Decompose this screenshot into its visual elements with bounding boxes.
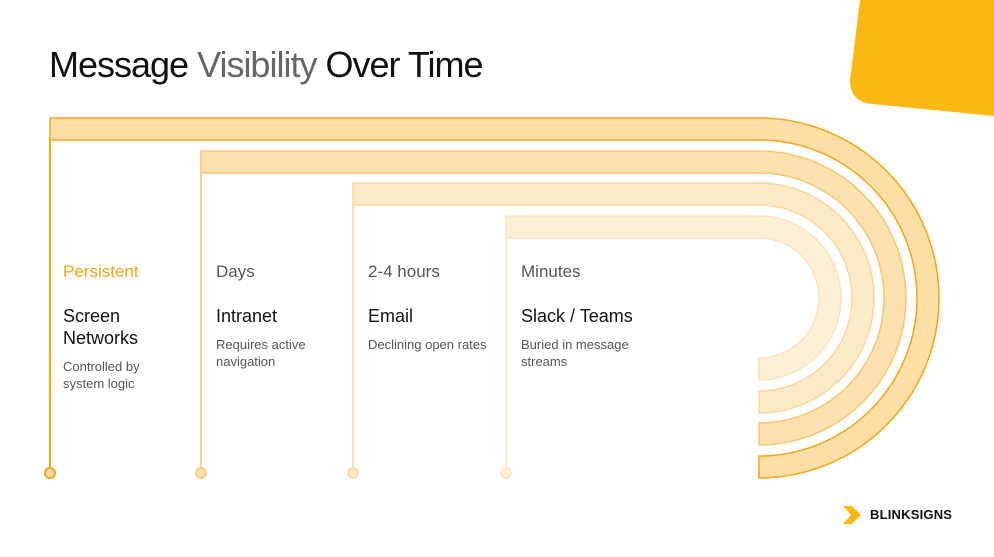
logo: BLINKSIGNS [870,507,952,522]
band: screen networks [45,118,939,478]
column: email: 2-4 hours [368,262,440,281]
column: intranet: Days [216,262,255,281]
column: slack: streams [521,354,567,369]
column: slack: Slack / Teams [521,306,633,326]
column: slack [521,262,633,369]
column: screen networks: Networks [63,328,138,348]
column: intranet [216,262,306,369]
column: intranet: Intranet [216,306,277,326]
column: screen networks: Persistent [63,262,139,281]
column: screen networks: Controlled by [63,359,140,374]
title: Message Visibility Over Time [49,44,482,85]
band: intranet [196,151,906,478]
column: email: Declining open rates [368,337,487,352]
column: slack: Buried in message [521,337,629,352]
logo [843,506,952,524]
column: email: Email [368,306,413,326]
column: screen networks [63,262,140,391]
column: screen networks: system logic [63,376,135,391]
column: intranet: Requires active [216,337,306,352]
column: slack: Minutes [521,262,581,281]
column: email [368,262,487,352]
column: screen networks: Screen [63,306,120,326]
icon: chevron [843,506,861,524]
band: email [348,183,874,478]
column: intranet: navigation [216,354,275,369]
band: slack [501,216,841,478]
